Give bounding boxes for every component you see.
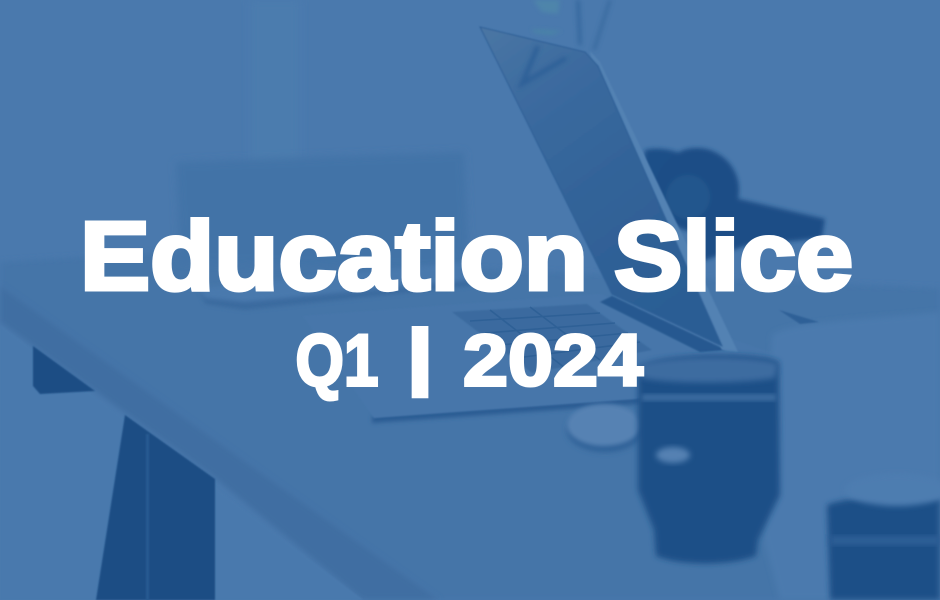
desk front edge (0, 285, 440, 600)
title (80, 202, 853, 310)
subtitle: Q1 (296, 320, 378, 402)
laptop hinge (600, 296, 726, 352)
plant (531, 0, 612, 50)
subtitle: 2024 (463, 320, 643, 402)
paper on the desk (779, 310, 819, 324)
title: Slice (614, 202, 853, 310)
mouse (567, 408, 643, 452)
laptop base (372, 396, 640, 423)
white mug (764, 312, 940, 600)
laptop lid edge (590, 51, 738, 352)
laptop screen (480, 27, 722, 346)
subtitle: | (410, 318, 430, 395)
screen reflection (522, 46, 566, 84)
headphones (640, 148, 825, 262)
desk surface (0, 250, 940, 600)
title: Education (80, 202, 588, 310)
desk legs (33, 346, 95, 394)
small dark mug (827, 474, 940, 600)
lens mug (638, 355, 780, 564)
keyboard (452, 304, 652, 373)
subtitle (296, 318, 643, 402)
books (176, 152, 468, 270)
floor under the desk (0, 325, 363, 600)
